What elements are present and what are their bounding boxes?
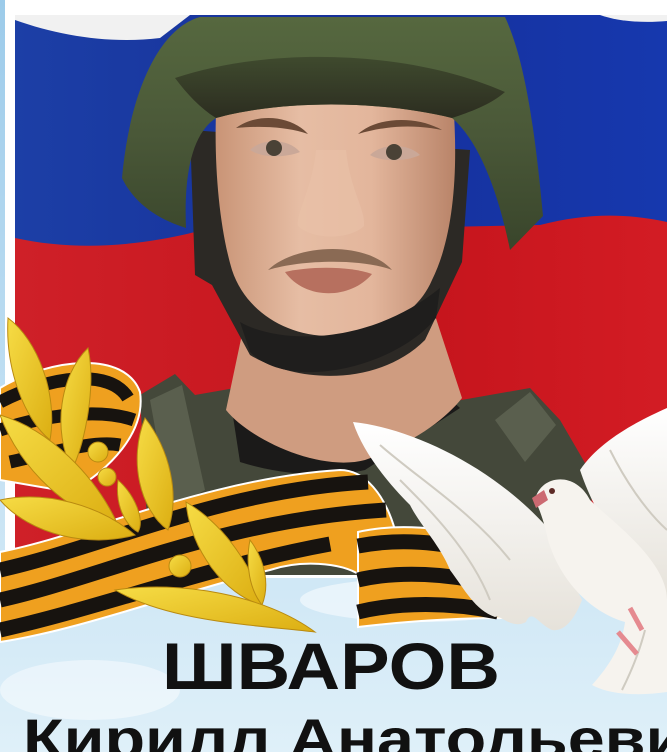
helmet	[122, 17, 543, 250]
chin strap	[240, 288, 440, 372]
dove	[353, 408, 667, 694]
neck	[226, 300, 462, 463]
surname: ШВАРОВ	[162, 629, 500, 703]
dove body and tail	[535, 479, 667, 694]
face	[216, 100, 455, 336]
helmet shadow band	[175, 57, 505, 118]
eyes	[250, 141, 300, 156]
ribbon of Saint George	[0, 363, 505, 642]
uniform	[140, 374, 592, 575]
eyebrows	[236, 118, 308, 134]
nose	[298, 150, 364, 236]
flag	[15, 15, 667, 575]
dove feet	[618, 608, 642, 654]
straps	[190, 130, 470, 376]
moustache and mouth	[268, 249, 392, 270]
soldier portrait	[122, 17, 592, 575]
dove left wing	[353, 422, 582, 630]
dove beak and eye	[532, 490, 548, 508]
laurel branch	[0, 318, 315, 632]
dove right wing	[580, 408, 667, 600]
